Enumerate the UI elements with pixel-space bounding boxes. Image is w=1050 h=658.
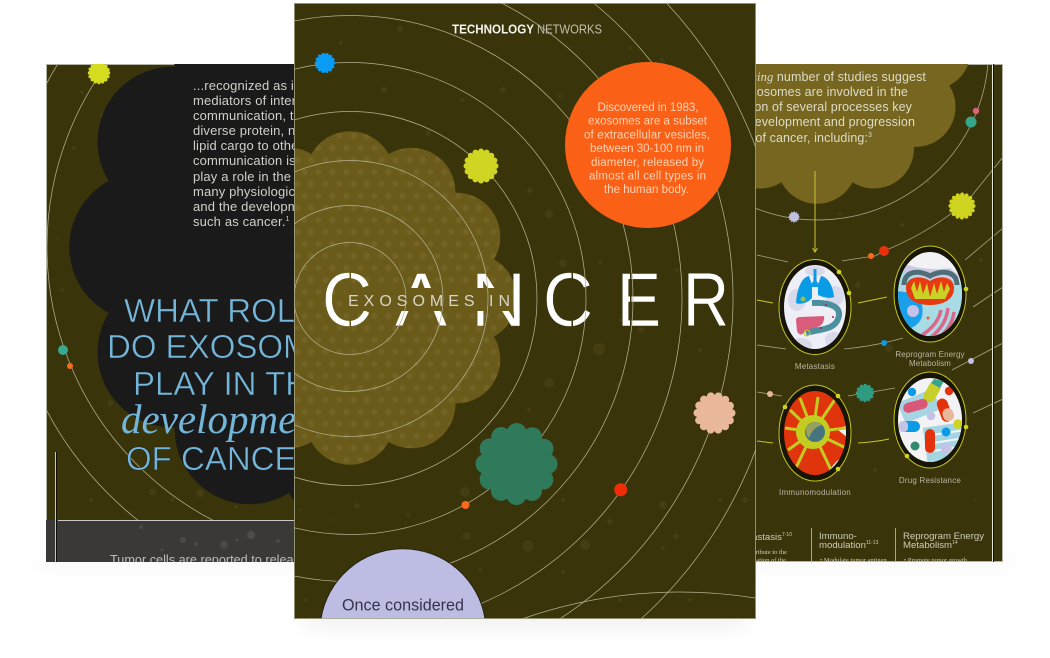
orange planet — [67, 363, 73, 369]
planet: peach — [698, 396, 732, 430]
callout: discovered in 1983 — [565, 62, 731, 228]
right intro text: to the development and progression — [712, 115, 915, 129]
column: immunomodulation — [820, 532, 886, 562]
label: reprogram energy metabolism: Reprogram Energy — [895, 350, 965, 359]
left body text: such as cancer. — [193, 214, 286, 229]
dark cloud bottom lobe — [289, 493, 294, 501]
column: immunomodulation: 11-13 — [866, 540, 879, 546]
planet: yellow — [466, 152, 496, 180]
left page orbit rings — [46, 64, 214, 520]
icon: metastasis oval — [779, 260, 851, 354]
vertical rule — [992, 64, 994, 562]
callout: once considered: cellular trash — [358, 617, 448, 634]
yellow planet — [90, 64, 108, 82]
right intro text: that exosomes are involved in the — [718, 85, 908, 99]
icon: immunomodulation oval — [779, 385, 851, 481]
column: reprogram energy metabolism: Reprogram Energy — [903, 531, 984, 542]
left body text: 1 — [286, 216, 290, 223]
column: metastasis: contribute to the — [744, 549, 787, 556]
left headline: WHAT ROLE — [124, 292, 317, 329]
subtitle: exosomes in: EXOSOMES IN — [348, 293, 510, 310]
column: metastasis: Metastasis — [736, 532, 782, 543]
callout: discovered in 1983: the human body. — [604, 184, 689, 196]
planet: green — [486, 433, 548, 495]
left headline — [110, 298, 294, 470]
left headline: OF CANCER? — [126, 440, 339, 477]
callout: once considered — [321, 549, 485, 634]
column: immunomodulation: modulation — [819, 540, 866, 551]
label: metastasis: Metastasis — [795, 362, 835, 371]
logo: technology networks: NETWORKS — [537, 22, 602, 36]
callout: once considered: Once considered — [342, 596, 464, 614]
left headline: DO EXOSOMES — [107, 328, 355, 365]
left body text: and the development of diseases — [193, 199, 389, 214]
panel: left page — [46, 64, 294, 562]
column: immunomodulation: Immuno- — [819, 531, 857, 542]
logo: technology networks — [452, 22, 602, 36]
grey band text: Tumor cells are reported to release — [110, 553, 307, 567]
title: CANCER: C — [543, 258, 593, 343]
left body text — [193, 80, 294, 226]
vertical rule — [55, 452, 57, 562]
left body text: mediators of intercellular — [193, 93, 339, 108]
cover speckles — [298, 26, 748, 602]
left body text: communication is thought to — [193, 153, 359, 168]
page shadows — [40, 558, 1010, 622]
column: reprogram energy metabolism: • Promote tumor growth — [904, 557, 968, 564]
title stencil cuts — [345, 268, 632, 330]
column: reprogram energy metabolism — [904, 532, 984, 562]
label: metabolism line: Metabolism — [909, 359, 951, 368]
left headline: PLAY IN THE — [133, 365, 331, 402]
title: CANCER: N — [471, 258, 526, 343]
right page orbit segments — [750, 64, 1003, 443]
icon: reprogram energy metabolism oval — [890, 246, 968, 342]
bottom grey band — [46, 520, 306, 562]
cover border — [294, 4, 756, 618]
column: reprogram energy metabolism: 14 — [952, 540, 958, 546]
logo: technology networks: TECHNOLOGY — [452, 22, 535, 36]
arrow — [812, 171, 818, 252]
column: reprogram energy metabolism: Metabolism — [903, 540, 952, 551]
left headline: development — [121, 396, 330, 442]
left body text: many physiological processes — [193, 184, 370, 199]
planet: blue — [316, 54, 334, 72]
title: CANCER: R — [683, 258, 729, 343]
title: CANCER — [326, 272, 726, 326]
icon: drug resistance oval — [894, 372, 968, 468]
right intro text — [756, 72, 926, 144]
left body text: lipid cargo to other cells. This — [193, 138, 366, 153]
right page planets — [767, 108, 979, 401]
planet: small orange — [462, 501, 470, 509]
callout: discovered in 1983: between 30-100 nm in — [590, 143, 704, 155]
right intro text: 3 — [868, 132, 872, 139]
callout: discovered in 1983: almost all cell types in — [589, 170, 706, 182]
right intro text: An increasing number of studies suggest — [701, 70, 926, 84]
panel: front cover — [294, 3, 756, 619]
teal planet — [58, 345, 68, 355]
right page speckles — [838, 180, 983, 502]
planet: red — [614, 483, 627, 496]
dark cloud — [69, 64, 294, 504]
label: immunomodulation: Immunomodulation — [779, 488, 851, 497]
callout: discovered in 1983: of extracellular vesicles, — [584, 129, 710, 141]
column: metastasis — [756, 532, 792, 562]
left page speckles — [56, 90, 238, 509]
title: CANCER: E — [617, 258, 661, 343]
cover orbit rings — [18, 0, 756, 630]
right intro text: of cancer, including: — [755, 131, 868, 145]
column: immunomodulation: • Modulate tumor antigen — [820, 557, 887, 564]
left body text: diverse protein, nucleic acid and — [193, 123, 384, 138]
title: CANCER: A — [395, 258, 447, 343]
callout: discovered in 1983: diameter, released by — [591, 157, 704, 169]
callout: discovered in 1983: exosomes are a subset — [588, 116, 708, 128]
panel: right page — [756, 64, 1003, 562]
label: drug resistance: Drug Resistance — [899, 476, 961, 485]
left body text: play a role in the regulation of — [193, 169, 369, 184]
column: metastasis: 7-10 — [782, 532, 792, 538]
central cloud — [294, 131, 514, 465]
title: CANCER: C — [322, 258, 372, 343]
right intro text: regulation of several processes key — [713, 100, 913, 114]
left body text: communication, transferring — [193, 108, 357, 123]
callout: discovered in 1983: Discovered in 1983, — [598, 102, 698, 114]
column: metastasis: formation of the — [744, 557, 786, 564]
left body text: ...recognized as important — [193, 78, 347, 93]
columns of summary text — [756, 528, 984, 562]
mustard cloud — [756, 64, 968, 204]
